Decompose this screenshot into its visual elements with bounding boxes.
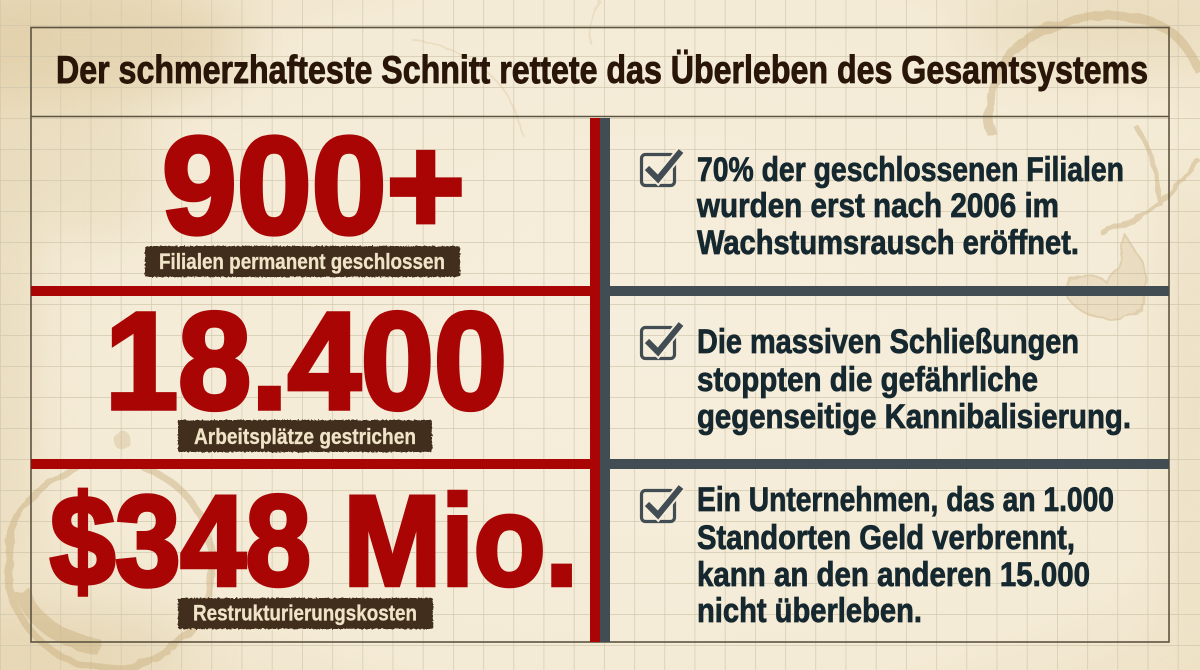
panel: stat $348 Mio. [50,470,578,629]
label: Arbeitsplätze gestrichen [178,420,432,452]
icon: checkbox [642,324,681,358]
text: closed branches [696,151,1124,262]
text: survival: nicht überleben. [697,592,922,630]
panel: stat 900+ [145,109,465,277]
label: Arbeitsplätze gestrichen: Arbeitsplätze gestrichen [194,424,416,449]
text: cannibalization: Die massiven Schließungen [697,323,1079,361]
text: cannibalization [697,323,1131,436]
panel: point 2 [642,323,1131,436]
text: cannibalization: gegenseitige Kannibalisierung. [697,398,1131,436]
icon: checkbox [642,151,681,186]
text: survival: kann an den anderen 15.000 [697,556,1090,594]
label: Restrukturierungskosten: Restrukturierungskosten [193,600,417,626]
panel: stat 18.400 [105,284,507,452]
text: survival [697,481,1114,630]
text: survival: Ein Unternehmen, das an 1.000 [697,481,1114,519]
number 18.400: 18.400 [105,284,507,438]
text: closed branches: Wachstumsrausch eröffnet. [697,224,1079,262]
panel: point 1 [642,151,1124,262]
text: closed branches: wurden erst nach 2006 im [696,187,1059,225]
number 900+: 900+ [162,109,465,263]
icon: checkbox [642,487,681,522]
text: survival: Standorten Geld verbrennt, [697,519,1075,557]
panel: point 3 [642,481,1114,630]
red and slate dividers [31,118,1169,642]
text: cannibalization: stoppten die gefährliche [697,361,1038,399]
text: closed branches: 70% der geschlossenen Filialen [697,151,1124,189]
number $348 Mio.: $348 Mio. [50,470,578,613]
label: Filialen permanent geschlossen: Filialen permanent geschlossen [159,249,445,274]
